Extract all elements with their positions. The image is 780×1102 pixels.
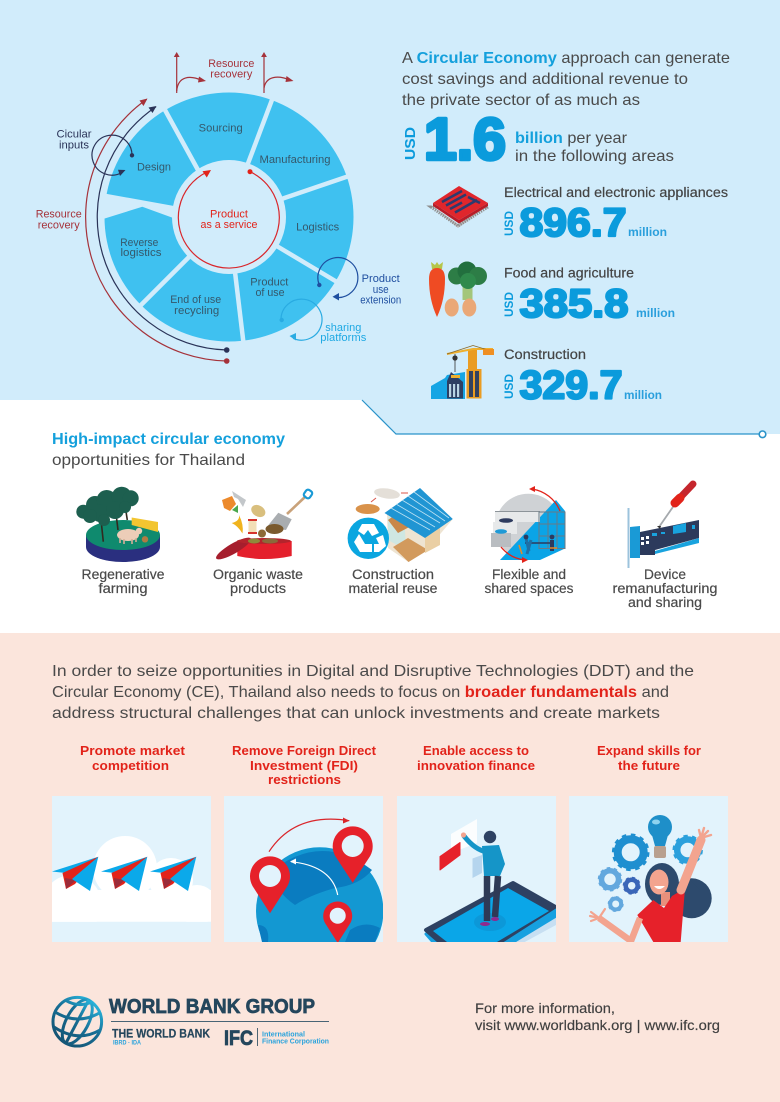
intro text: A Circular Economy approach can generate [402,50,730,67]
logo: World Bank Group: IBRD · IDA [113,1040,142,1046]
icon: recycling and house [348,487,453,562]
wheel stage labels: Reverse [120,237,158,249]
column: remove FDI restrictions [224,746,383,942]
wheel stage labels: of use [256,287,284,299]
heading [417,743,535,773]
icon: crane and buildings [431,346,494,399]
arrow: circular inputs loop [92,135,134,176]
panel: broader fundamentals background [0,633,780,1102]
text block: broader fundamentals: Circular Economy (CE), Thailand also needs to focus on broader fundamentals and [52,684,669,701]
logo: World Bank Group [53,995,329,1050]
illustration: paper planes above clouds [42,796,217,942]
wheel stage labels: Design [137,162,171,174]
label [484,567,574,596]
arrow: outer resource recovery [86,98,229,364]
illustration: person on smartphone [397,796,556,950]
wheel stage labels: Sourcing [199,122,243,134]
text block: more information: visit www.worldbank.org | www.ifc.org [475,1018,720,1033]
logo: World Bank Group: International [262,1032,305,1039]
label: farming [98,581,148,596]
heading: Investment (FDI) [250,758,358,773]
label: shared spaces [484,581,574,596]
label [612,567,718,610]
column: expand skills for the future [569,743,728,942]
wheel stage labels: logistics [120,247,162,259]
arrow: top resource recovery right [261,52,294,93]
sector: food and agriculture [504,266,675,326]
label: circular inputs: inputs [59,139,90,151]
sector: food and agriculture: million [636,306,675,320]
wheel stage labels: Product [250,276,288,288]
icon: circuit board and screwdriver [628,484,699,568]
logo: World Bank Group: Finance Corporation [262,1039,329,1046]
label [82,567,164,596]
arrow: product use extension loop [317,258,358,300]
label: and sharing [628,595,702,610]
label: resource recovery top: Resource [208,58,254,70]
sector: electrical and electronic appliances: USD [504,211,516,236]
label: product use extension: use [373,284,389,296]
big number: USD 1.6 billion: in the following areas [515,148,674,165]
illustration: globe with location pins [224,796,383,942]
sector: construction [504,347,662,408]
section connector line [362,400,766,438]
column: enable access to innovation finance [397,743,556,950]
chart: circular economy wheel [36,52,401,364]
logo: World Bank Group: IFC [224,1027,253,1050]
product as a service loop: as a service [200,219,258,231]
icon: globe [53,995,102,1048]
label: sharing platforms [320,322,367,344]
opportunity: organic waste products [213,489,313,596]
label: resource recovery left: recovery [38,219,80,231]
sector: construction: Construction [504,347,586,362]
text block: broader fundamentals [52,663,694,722]
heading: Expand skills for [597,743,701,758]
opportunity: construction material reuse [348,487,453,596]
label: circular inputs [56,129,92,151]
label: resource recovery left: Resource [36,209,82,221]
icon: farm disc [76,487,160,562]
heading: competition [92,758,169,773]
heading: Remove Foreign Direct [232,743,377,758]
heading: high-impact opportunities: High-impact circular economy [52,431,285,448]
intro text: the private sector of as much as [402,92,640,109]
big number: USD 1.6 billion: 1.6 [424,106,506,172]
label: resource recovery top: recovery [210,69,253,81]
sector: electrical and electronic appliances [504,185,728,245]
heading [232,743,377,787]
sector: food and agriculture: Food and agriculture [504,266,634,281]
wheel stage labels: Logistics [296,222,340,234]
big number: USD 1.6 billion: USD [402,127,419,160]
label: Regenerative [82,567,164,582]
label: product use extension: Product [362,273,400,285]
label: sharing platforms: sharing [325,322,361,334]
arrow: top resource recovery left [174,52,206,93]
label: Organic waste [213,567,303,582]
opportunity: regenerative farming [76,487,164,596]
heading: restrictions [268,772,341,787]
icon: compost bin and shovel [214,489,313,563]
heading: high-impact opportunities [52,431,285,469]
arrow: circular inputs flow [97,106,230,353]
heading [80,743,186,773]
intro text [402,50,730,109]
icon: carrot, broccoli and eggs [429,262,487,317]
label: product use extension [360,273,401,307]
wheel stage labels: Manufacturing [260,154,330,166]
label: circular inputs: Cicular [56,129,92,141]
label: resource recovery left [36,209,82,231]
heading [597,743,701,773]
label: Construction [352,567,434,582]
heading: the future [618,758,680,773]
sector: construction: USD [504,374,516,399]
illustration: woman with gears and light bulb [569,796,728,942]
arrow: sharing platforms loop [280,299,322,340]
wheel stage labels: recycling [174,305,219,317]
sector: food and agriculture: 385.8 [520,282,628,326]
text block: broader fundamentals: address structural challenges that can unlock investments and create markets [52,705,660,722]
icon: microchip [430,186,489,228]
label: resource recovery top [208,58,254,81]
label: product use extension: extension [360,295,401,307]
heading: Promote market [80,743,186,758]
label: products [230,581,286,596]
column: promote market competition [52,746,211,942]
product as a service loop: Product [210,208,248,220]
label: Device [644,567,686,582]
wheel ring [96,92,354,343]
sector: construction: million [624,388,662,402]
label [348,567,438,596]
text block: more information: For more information, [475,1001,615,1016]
label: material reuse [348,581,438,596]
sector: electrical and electronic appliances: 896.7 [520,201,626,245]
sector: electrical and electronic appliances: Electrical and electronic appliances [504,185,728,200]
label: sharing platforms: platforms [320,332,367,344]
text block: more information [475,1001,720,1033]
big number: USD 1.6 billion: billion per year [515,130,627,147]
big number: USD 1.6 billion [402,106,674,172]
logo: World Bank Group: THE WORLD BANK [112,1029,211,1041]
intro text: cost savings and additional revenue to [402,71,688,88]
label: Flexible and [492,567,566,582]
panel: circular economy background [0,0,780,434]
sector: food and agriculture: USD [504,292,516,317]
heading: high-impact opportunities: opportunities for Thailand [52,452,245,469]
logo: World Bank Group: WORLD BANK GROUP [109,996,315,1018]
label: remanufacturing [612,581,718,596]
opportunity: flexible and shared spaces [484,486,574,596]
heading: Enable access to [423,743,529,758]
wheel stage labels: End of use [170,294,221,306]
wheel stage labels [120,122,340,317]
icon: office space [491,486,565,563]
product as a service loop [178,169,279,268]
sector: construction: 329.7 [520,364,622,408]
sector: electrical and electronic appliances: million [628,225,667,239]
label [213,567,303,596]
opportunity: device remanufacturing and sharing [612,484,718,610]
text block: broader fundamentals: In order to seize opportunities in Digital and Disruptive Technologies (DDT) and the [52,663,694,680]
heading: innovation finance [417,758,535,773]
